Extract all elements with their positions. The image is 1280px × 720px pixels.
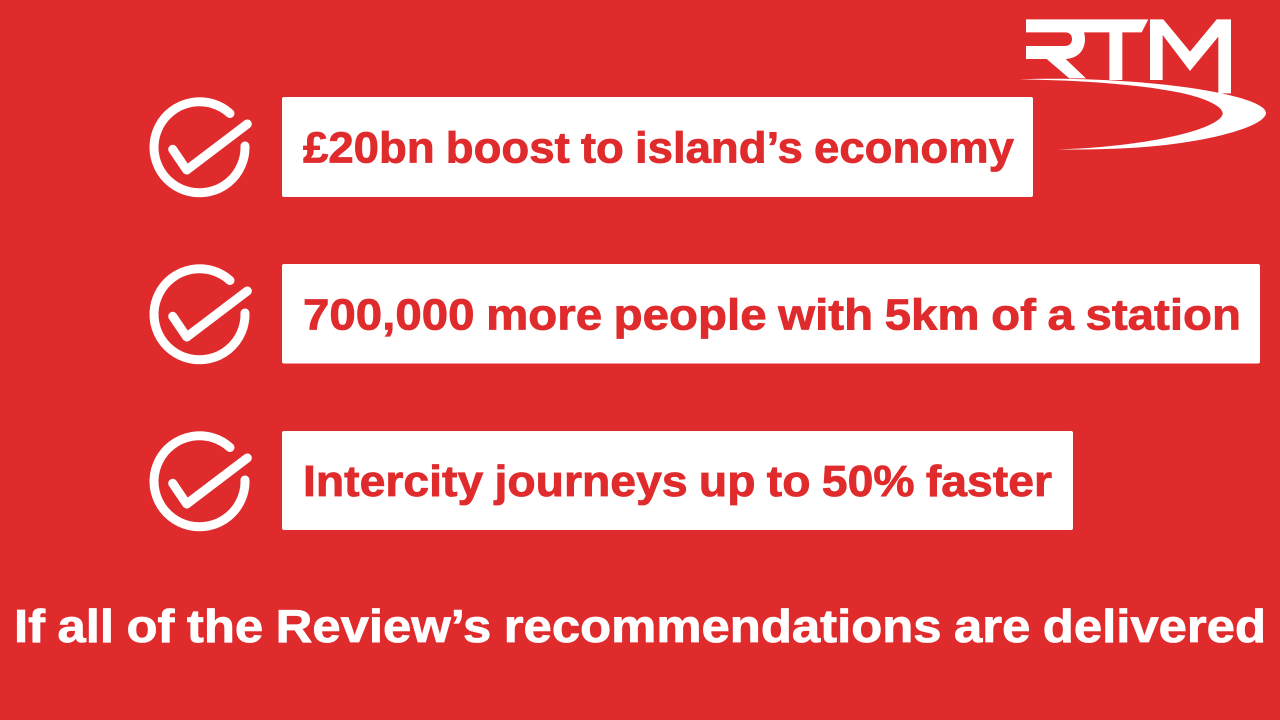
icon: RTM logo: [1019, 19, 1266, 149]
item 1: economy boost: [154, 97, 1033, 197]
footer statement: If all of the Review’s recommendations are delivered: [14, 600, 1266, 652]
icon: check mark 1: [154, 102, 247, 193]
icon: check mark 2: [154, 269, 247, 360]
label box 2: 700,000 more people with 5km of a station: [303, 290, 1241, 340]
label box 3: [282, 431, 1073, 530]
item 2: station access: [154, 264, 1260, 364]
label box 3: Intercity journeys up to 50% faster: [303, 457, 1052, 506]
icon: check mark 3: [154, 436, 247, 527]
item 3: journey times: [154, 431, 1073, 530]
label box 1: £20bn boost to island’s economy: [303, 124, 1015, 172]
label box 2: [282, 264, 1260, 364]
label box 1: [282, 97, 1033, 197]
